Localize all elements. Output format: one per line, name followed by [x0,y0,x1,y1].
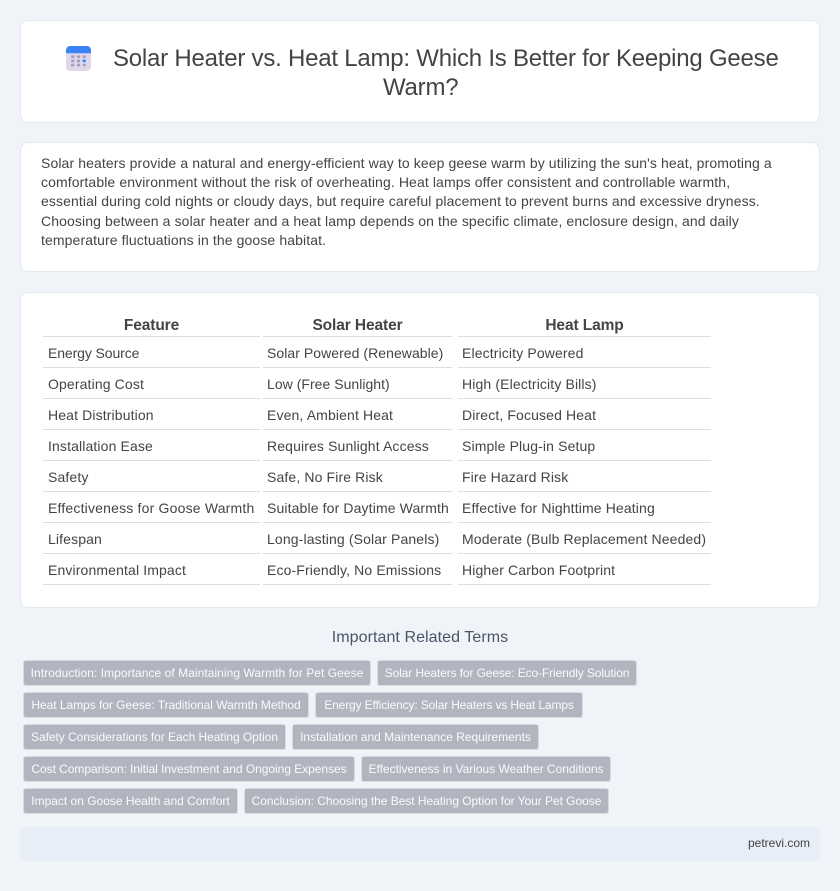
table row: heat distribution: Even, Ambient Heat [267,407,393,423]
tag [292,724,539,750]
table row: energy source: Solar Powered (Renewable) [267,345,443,361]
table row: lifespan: Moderate (Bulb Replacement Needed) [462,531,706,547]
footer text: site name: petrevi.com [748,836,810,850]
tag: Introduction: Importance of Maintaining Warmth for Pet Geese [31,666,363,680]
icon: calendar [66,46,91,71]
table row: installation ease: Installation Ease [48,438,153,454]
table row: environmental impact [48,562,615,578]
table row: operating cost [48,376,597,392]
table header: heat lamp: Heat Lamp [545,317,624,334]
table row: heat distribution: Heat Distribution [48,407,154,423]
panel: comparison table [20,292,820,608]
tag [244,788,609,814]
tag [23,692,309,718]
table row: effectiveness [48,500,655,516]
table row: safety: Safe, No Fire Risk [267,469,383,485]
table header: solar heater: Solar Heater [312,317,403,334]
heading: title line 1: Solar Heater vs. Heat Lamp: Which Is Better for Keeping Geese [113,45,779,72]
table row: safety [48,469,568,485]
tag: Solar Heaters for Geese: Eco-Friendly Solution [385,666,629,680]
table row: heat distribution [48,407,596,423]
tag [315,692,583,718]
table row: safety: Safety [48,469,88,485]
tag [23,788,238,814]
table row: energy source [48,345,584,361]
tag: Heat Lamps for Geese: Traditional Warmth Method [31,698,301,712]
heading: important related terms: Important Related Terms [332,629,508,646]
table row: energy source: Electricity Powered [462,345,584,361]
tag [377,660,637,686]
text block: intro paragraph: Choosing between a solar heater and a heat lamp depends on the specific climate, enclosure design, and daily [41,213,739,229]
table row: installation ease [48,438,595,454]
tag: Energy Efficiency: Solar Heaters vs Heat Lamps [324,698,574,712]
table row: safety: Fire Hazard Risk [462,469,568,485]
text block: intro paragraph [41,155,772,248]
table row: heat distribution: Direct, Focused Heat [462,407,596,423]
footer bar [20,827,820,861]
tag: Installation and Maintenance Requirements [300,730,531,744]
table row: environmental impact: Higher Carbon Footprint [462,562,615,578]
table row: effectiveness: Suitable for Daytime Warmth [267,500,449,516]
tag [23,724,286,750]
table row: lifespan: Lifespan [48,531,102,547]
table row: energy source: Energy Source [48,345,139,361]
tag: Effectiveness in Various Weather Conditions [368,762,604,776]
table row: installation ease: Simple Plug-in Setup [462,438,595,454]
table row: effectiveness: Effectiveness for Goose Warmth [48,500,254,516]
table row: operating cost: High (Electricity Bills) [462,376,597,392]
tag: Safety Considerations for Each Heating Option [31,730,278,744]
panel: title card [20,20,820,123]
table row: lifespan: Long-lasting (Solar Panels) [267,531,439,547]
text block: intro paragraph: Solar heaters provide a natural and energy-efficient way to keep geese warm by utilizing the sun's heat, promoting a [41,155,772,171]
tag [23,756,355,782]
table row: operating cost: Low (Free Sunlight) [267,376,390,392]
table row: effectiveness: Effective for Nighttime Heating [462,500,655,516]
table row: environmental impact: Environmental Impact [48,562,186,578]
table row: installation ease: Requires Sunlight Access [267,438,429,454]
table header: feature: Feature [124,317,179,334]
text block: intro paragraph: essential during cold nights or cloudy days, but require careful placement to prevent burns and excessive dryness. [41,193,760,209]
table row: environmental impact: Eco-Friendly, No Emissions [267,562,441,578]
tag: Impact on Goose Health and Comfort [31,794,230,808]
tag list: related terms [23,660,637,814]
tag: Cost Comparison: Initial Investment and Ongoing Expenses [31,762,347,776]
panel: intro text [20,142,820,272]
tag [361,756,611,782]
table row: lifespan [48,531,706,547]
heading: title line 2: Warm? [383,74,458,101]
tag [23,660,371,686]
text block: intro paragraph: temperature fluctuations in the goose habitat. [41,232,326,248]
table row: operating cost: Operating Cost [48,376,144,392]
text block: intro paragraph: comfortable environment without the risk of overheating. Heat lamps offer consistent and controllable warmth, [41,174,730,190]
tag: Conclusion: Choosing the Best Heating Option for Your Pet Goose [252,794,601,808]
